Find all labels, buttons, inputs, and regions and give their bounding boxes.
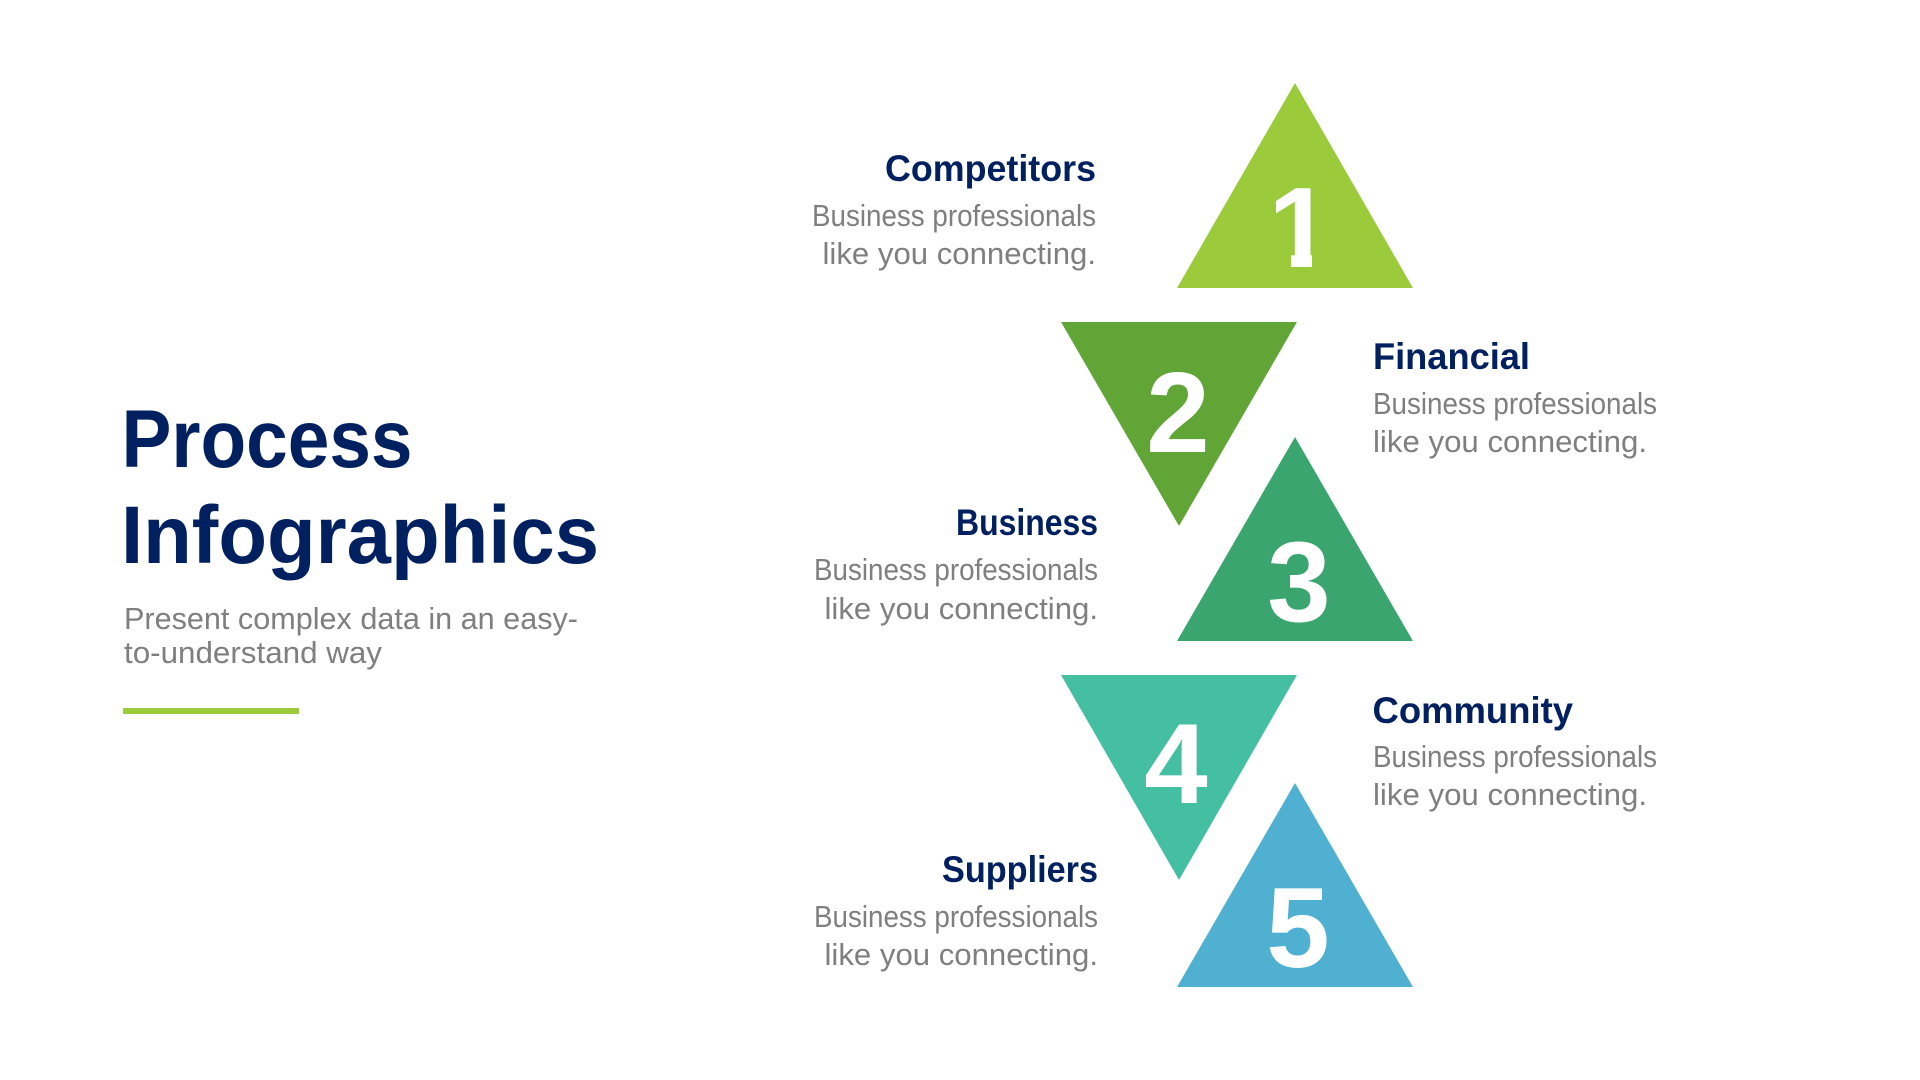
label: competitors	[812, 148, 1096, 271]
label: financial	[1373, 336, 1657, 459]
step 4 triangle	[1061, 675, 1297, 880]
label: suppliers	[814, 849, 1098, 972]
step 1 triangle	[1177, 83, 1413, 288]
description: business	[814, 552, 1098, 626]
infographic slide	[123, 83, 1656, 987]
description: business: Business professionals	[814, 552, 1098, 587]
description: competitors: Business professionals	[812, 198, 1096, 233]
description: competitors	[812, 198, 1096, 271]
heading: competitors: Competitors	[885, 148, 1096, 189]
description: suppliers	[814, 899, 1098, 972]
description: suppliers: like you connecting.	[824, 937, 1098, 972]
subtitle	[124, 601, 578, 670]
description: financial: like you connecting.	[1373, 424, 1647, 459]
step 5 triangle	[1177, 783, 1413, 987]
description: financial	[1373, 386, 1657, 459]
heading: business: Business	[956, 502, 1098, 543]
step 3 triangle	[1177, 437, 1413, 641]
number 2: 2	[1146, 350, 1210, 477]
subtitle: to-understand way	[124, 635, 382, 670]
number 4: 4	[1144, 701, 1208, 828]
description: community: like you connecting.	[1373, 777, 1647, 812]
accent bar	[123, 708, 299, 714]
heading: community: Community	[1372, 690, 1573, 731]
label: community	[1372, 690, 1657, 812]
number 3: 3	[1267, 519, 1331, 646]
description: financial: Business professionals	[1373, 386, 1657, 421]
label: business	[814, 502, 1098, 626]
heading: financial: Financial	[1373, 336, 1530, 377]
heading: suppliers: Suppliers	[942, 849, 1098, 890]
subtitle: Present complex data in an easy-	[124, 601, 578, 636]
description: suppliers: Business professionals	[814, 899, 1098, 934]
description: business: like you connecting.	[824, 591, 1098, 626]
number 1: 1	[1268, 165, 1332, 292]
step 2 triangle	[1061, 322, 1297, 526]
title: Process	[122, 394, 412, 485]
description: community	[1373, 739, 1657, 812]
description: community: Business professionals	[1373, 739, 1657, 774]
number 5: 5	[1266, 865, 1330, 992]
title	[121, 394, 599, 581]
title: Infographics	[121, 490, 599, 581]
description: competitors: like you connecting.	[822, 236, 1096, 271]
